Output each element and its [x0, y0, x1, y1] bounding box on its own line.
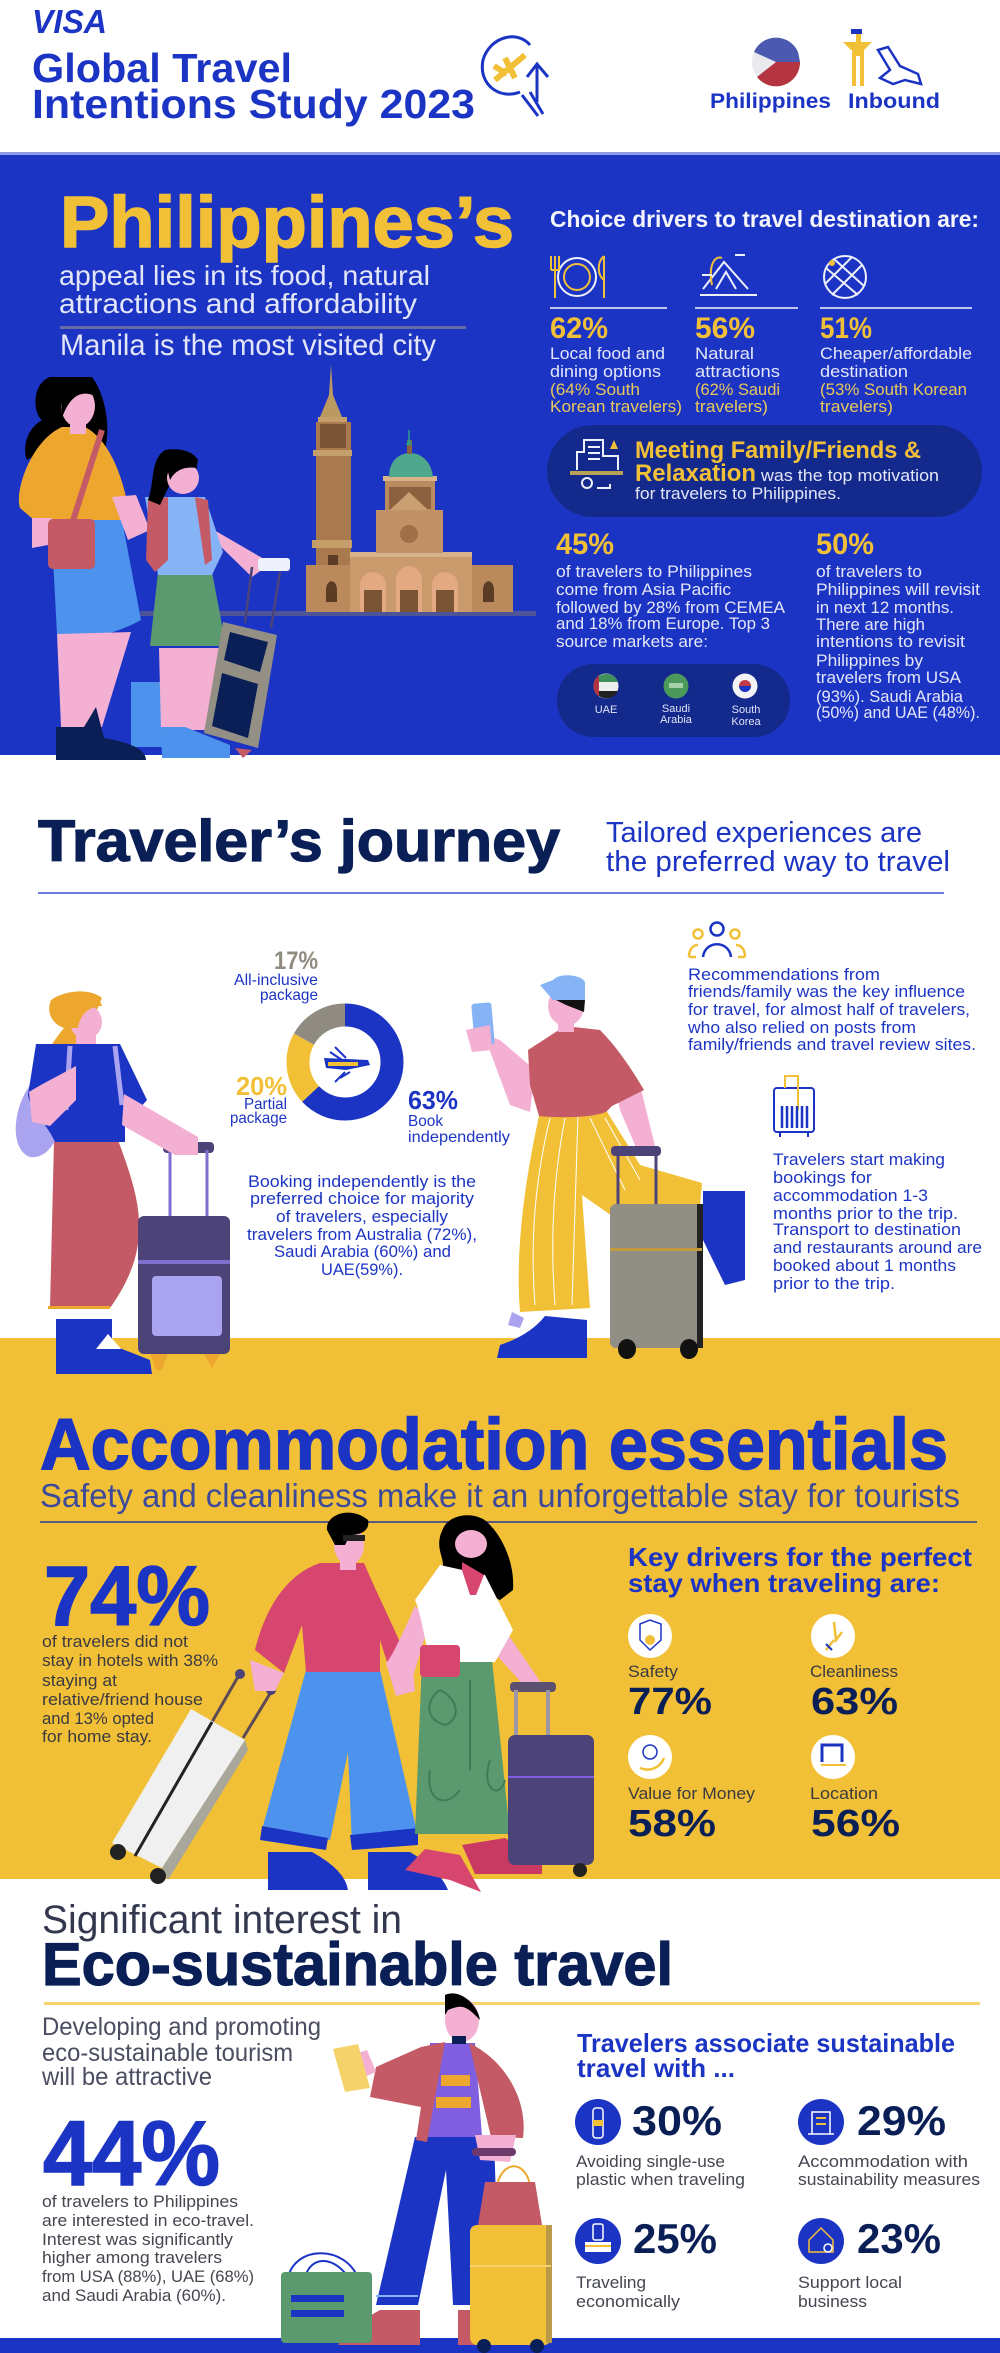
heading: accommodation essentials: Accommodation essentials: [40, 1405, 948, 1485]
callout: top motivation: Relaxation: [635, 460, 756, 487]
driver: safety: 77%: [628, 1681, 712, 1723]
text: booking independently: of travelers, especially: [276, 1207, 449, 1226]
stat: 44%: 44%: [43, 2103, 220, 2205]
label: Philippines: Philippines: [710, 90, 831, 113]
text: 44% detail: of travelers to Philippines: [42, 2193, 238, 2211]
text: booking independently: Booking independently is the: [248, 1172, 476, 1191]
driver: nature: attractions: [695, 363, 780, 381]
stat: 25% traveling economically: economically: [576, 2293, 681, 2311]
callout: top motivation: for travelers to Philippines.: [635, 485, 841, 503]
text: booking independently: [247, 1172, 477, 1279]
stat: 50% revisit: [816, 528, 980, 722]
heading: Traveler's journey: Traveler’s journey: [38, 809, 560, 874]
text: recommendations: [687, 965, 976, 1054]
title: Global Travel: [32, 45, 292, 91]
text: 74% detail: relative/friend house: [42, 1691, 203, 1709]
text: developing and promoting: Developing and promoting: [42, 2013, 321, 2041]
stat: 50% revisit: travelers from USA: [816, 669, 961, 687]
donut label: 20%: [230, 1071, 287, 1127]
stat: 62%: 62%: [550, 312, 608, 345]
stat: 29% accommodation: 29%: [857, 2097, 946, 2144]
donut label: 63%: [408, 1085, 510, 1146]
stat: 45% source markets: come from Asia Pacific: [556, 581, 731, 599]
stat: 25% traveling economically: Traveling: [576, 2274, 646, 2292]
panel: accommodation essentials background: [0, 1338, 1000, 1879]
flag: Saudi Arabia: Saudi: [662, 703, 690, 715]
logo: VISA: VISA: [32, 3, 107, 40]
stat: 25% traveling economically: 25%: [633, 2215, 717, 2262]
man: [333, 1993, 524, 2345]
heading: key drivers: Key drivers for the perfect: [628, 1542, 972, 1572]
heading: travelers associate: Travelers associate sustainable: [577, 2028, 955, 2058]
stat: 50% revisit: in next 12 months.: [816, 599, 954, 617]
stat: 50% revisit: of travelers to: [816, 563, 922, 581]
text: booking lead time: [773, 1150, 982, 1293]
donut chart: booking type: [298, 1015, 392, 1109]
driver: cleanliness: [810, 1614, 898, 1723]
driver: affordability: [820, 256, 972, 416]
text: 74% detail: staying at: [42, 1672, 117, 1690]
subheading: attractions and affordability: [59, 288, 417, 319]
stat: 45% source markets: and 18% from Europe. Top 3: [556, 615, 770, 633]
icon: Philippines flag: [752, 38, 800, 86]
icon: luggage: [774, 1076, 814, 1137]
stat: 30% avoiding plastic: [575, 2097, 745, 2189]
stat: 56%: 56%: [695, 312, 755, 345]
text: 74% detail: of travelers did not: [42, 1633, 188, 1651]
text: 44% detail: are interested in eco-travel.: [42, 2212, 254, 2230]
text: 44% detail: Interest was significantly: [42, 2231, 234, 2249]
driver: value for money: 58%: [628, 1803, 716, 1845]
green bag: [281, 2253, 372, 2343]
text: recommendations: who also relied on posts from: [687, 1018, 916, 1037]
stat: 45% source markets: of travelers to Philippines: [556, 563, 752, 581]
icon: magnifier with plane: [482, 37, 548, 116]
driver: affordability: Cheaper/affordable: [820, 345, 972, 363]
driver: nature: [695, 255, 798, 416]
heading: key drivers: stay when traveling are:: [628, 1568, 940, 1598]
stat: 50% revisit: 50%: [816, 528, 874, 561]
purple suitcase: [508, 1682, 594, 1877]
stat: 30% avoiding plastic: plastic when traveling: [576, 2171, 745, 2189]
stat: 23% support local: 23%: [857, 2215, 941, 2262]
title: [32, 45, 475, 127]
text: 74% detail: for home stay.: [42, 1728, 152, 1746]
donut label: 20%: 20%: [236, 1071, 287, 1101]
subheading: appeal lies in its food, natural: [59, 260, 430, 291]
label: Inbound: Inbound: [848, 90, 940, 113]
stat: 74%: 74%: [44, 1549, 210, 1643]
text: booking lead time: accommodation 1-3: [773, 1186, 928, 1205]
icon: globe: [824, 256, 866, 298]
stat: 29% accommodation: Accommodation with: [798, 2153, 968, 2171]
icon: mountain: [700, 255, 757, 295]
driver: cleanliness: Cleanliness: [810, 1663, 898, 1681]
heading: key drivers: [628, 1542, 972, 1598]
stat: 51%: 51%: [820, 312, 872, 345]
donut label: 63%: Book: [408, 1113, 444, 1130]
illustration: traveler with bags: [281, 1993, 552, 2353]
text: booking lead time: prior to the trip.: [773, 1274, 895, 1293]
text: 44% detail: and Saudi Arabia (60%).: [42, 2287, 226, 2305]
driver: food: Korean travelers): [550, 398, 682, 416]
driver: location: [810, 1735, 900, 1845]
driver: location: Location: [810, 1785, 878, 1803]
driver: nature: (62% Saudi: [695, 381, 780, 399]
driver: safety: Safety: [628, 1663, 679, 1681]
driver: food: dining options: [550, 363, 661, 381]
text: booking independently: preferred choice for majority: [250, 1189, 475, 1208]
icon: people: [689, 922, 745, 957]
driver: value for money: [628, 1735, 756, 1845]
illustration: woman with suitcase: [16, 991, 230, 1374]
donut label: 17%: All-inclusive: [234, 972, 318, 989]
stat: 45% source markets: source markets are:: [556, 633, 708, 651]
panel: accommodation essentials: [40, 1405, 977, 1892]
heading: Philippines's: Philippines’s: [60, 183, 514, 263]
flag: UAE: [593, 674, 618, 716]
stat: 45% source markets: followed by 28% from CEMEA: [556, 599, 785, 617]
driver: food: (64% South: [550, 381, 640, 399]
panel background: [0, 152, 1000, 755]
text: 44% detail: [42, 2193, 254, 2305]
text: developing and promoting: will be attractive: [41, 2063, 212, 2091]
donut label: 63%: 63%: [408, 1085, 458, 1115]
stat: 45% source markets: [556, 528, 785, 651]
text: recommendations: family/friends and travel review sites.: [688, 1035, 976, 1054]
stat: 23% support local: [798, 2215, 941, 2311]
stat: 23% support local: Support local: [798, 2274, 902, 2292]
heading: travelers associate: travel with ...: [577, 2053, 735, 2083]
text: booking lead time: bookings for: [773, 1168, 872, 1187]
text: 74% detail: stay in hotels with 38%: [42, 1652, 218, 1670]
flag: Saudi Arabia: Arabia: [660, 714, 693, 726]
text: 74% detail: and 13% opted: [42, 1710, 154, 1728]
heading: choice drivers: Choice drivers to travel destination are:: [550, 206, 979, 232]
text: booking lead time: Transport to destination: [773, 1220, 961, 1239]
stat: 23% support local: business: [798, 2293, 867, 2311]
driver: nature: travelers): [695, 398, 768, 416]
illustration: Manila cathedral: [306, 364, 513, 612]
icon: plate and cutlery: [551, 256, 604, 298]
text: 44% detail: from USA (88%), UAE (68%): [42, 2268, 254, 2286]
panel: Philippines overview: [0, 152, 1000, 760]
driver: affordability: travelers): [820, 398, 893, 416]
flag: South Korea: Korea: [731, 716, 762, 728]
footer band: [0, 2338, 1000, 2353]
callout: top motivation: Meeting Family/Friends &: [635, 437, 921, 464]
donut label: 17%: [234, 947, 318, 1004]
heading: travelers associate: [577, 2028, 955, 2083]
driver: value for money: Value for Money: [628, 1785, 756, 1803]
text: Manila: Manila is the most visited city: [60, 329, 436, 362]
donut label: 20%: package: [230, 1110, 287, 1127]
flag: South Korea: [731, 674, 762, 728]
flag: South Korea: South: [732, 704, 760, 716]
text: booking lead time: Travelers start making: [773, 1150, 945, 1169]
text: booking lead time: and restaurants around are: [773, 1238, 982, 1257]
stat: 50% revisit: There are high: [816, 616, 925, 634]
subheading: safety and cleanliness: Safety and cleanliness make it an unforgettable stay for tourists: [40, 1477, 960, 1514]
illustration: couple with suitcases: [110, 1513, 594, 1892]
driver: food: [550, 256, 682, 416]
shelf line: [140, 611, 536, 616]
donut label: 63%: independently: [408, 1129, 510, 1146]
icon: city and map pin: [570, 440, 623, 488]
panel: top source markets: [557, 664, 790, 737]
subheading: [59, 260, 430, 319]
heading: eco-sustainable travel: Eco-sustainable travel: [42, 1931, 673, 1998]
stat: 45% source markets: 45%: [556, 528, 614, 561]
text: booking independently: Saudi Arabia (60%) and: [274, 1242, 451, 1261]
white suitcase: [110, 1669, 276, 1884]
title: Intentions Study 2023: [32, 81, 475, 127]
stat: 30% avoiding plastic: 30%: [632, 2097, 722, 2144]
stat: 29% accommodation: sustainability measures: [798, 2171, 980, 2189]
text: developing and promoting: [41, 2013, 321, 2091]
text: 74% detail: [42, 1633, 218, 1746]
text: booking lead time: booked about 1 months: [773, 1256, 956, 1275]
driver: safety: [628, 1614, 712, 1723]
stat: 30% avoiding plastic: Avoiding single-use: [576, 2153, 725, 2171]
icon: plane: [324, 1047, 370, 1082]
stat: 29% accommodation: [798, 2097, 980, 2189]
text: recommendations: friends/family was the key influence: [688, 982, 965, 1001]
illustration: mother and child: [19, 377, 290, 760]
flag: UAE: UAE: [595, 704, 617, 716]
callout: top motivation: was the top motivation: [760, 467, 939, 485]
panel: header: [32, 3, 940, 127]
subheading: tailored experiences: the preferred way to travel: [606, 846, 950, 878]
panel: traveler's journey: [38, 809, 982, 1293]
driver: nature: Natural: [695, 345, 754, 363]
subheading: significant interest: Significant interest in: [42, 1898, 402, 1942]
driver: affordability: (53% South Korean: [820, 381, 967, 399]
flag: Saudi Arabia: [660, 674, 693, 726]
panel: eco-sustainable travel: [0, 1898, 1000, 2353]
stat: 25% traveling economically: [575, 2215, 717, 2311]
text: developing and promoting: eco-sustainable tourism: [42, 2039, 293, 2067]
subheading: tailored experiences: [606, 817, 950, 878]
text: recommendations: for travel, for almost half of travelers,: [688, 1000, 970, 1019]
driver: food: Local food and: [550, 345, 665, 363]
donut label: 20%: Partial: [244, 1096, 287, 1113]
donut label: 17%: package: [260, 987, 318, 1004]
text: 44% detail: higher among travelers: [42, 2249, 222, 2267]
stat: 50% revisit: (93%). Saudi Arabia: [816, 688, 964, 706]
stat: 50% revisit: (50%) and UAE (48%).: [816, 704, 980, 722]
illustration: man with phone and suitcase: [466, 975, 745, 1359]
driver: affordability: destination: [820, 363, 908, 381]
shopping bag and suitcase: [470, 2166, 552, 2353]
driver: location: 56%: [811, 1803, 900, 1845]
icon: control tower and plane: [843, 29, 921, 86]
man: [250, 1513, 448, 1890]
text: booking independently: travelers from Australia (72%),: [247, 1225, 477, 1244]
text: recommendations: Recommendations from: [688, 965, 880, 984]
text: booking independently: UAE(59%).: [321, 1260, 403, 1279]
driver: cleanliness: 63%: [811, 1681, 898, 1723]
donut label: 17%: 17%: [274, 947, 318, 975]
stat: 50% revisit: intentions to revisit: [816, 633, 965, 651]
text: booking lead time: months prior to the trip.: [773, 1204, 958, 1223]
callout: top motivation: [547, 425, 982, 517]
stat: 50% revisit: Philippines by: [816, 652, 924, 670]
subheading: tailored experiences: Tailored experiences are: [606, 817, 922, 849]
woman: [386, 1515, 542, 1892]
stat: 50% revisit: Philippines will revisit: [816, 581, 980, 599]
